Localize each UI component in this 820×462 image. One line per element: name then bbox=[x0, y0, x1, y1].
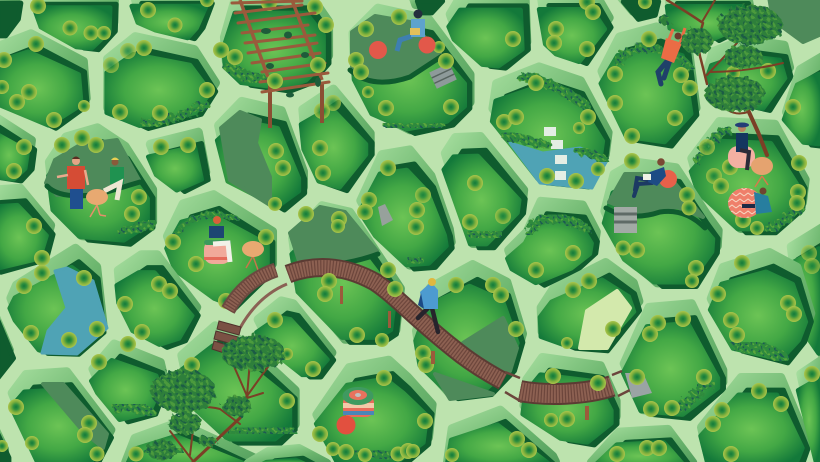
cell 6 bbox=[0, 34, 87, 128]
standing man bbox=[57, 156, 88, 209]
cell 49 bbox=[0, 308, 13, 378]
pergola rungs bbox=[232, 1, 329, 92]
bush: edge bbox=[410, 258, 422, 262]
terrace: under bridge bbox=[290, 207, 377, 264]
bush: hex bbox=[738, 345, 782, 358]
cell 9 bbox=[49, 128, 153, 244]
pergola vines bbox=[261, 28, 321, 98]
tree: top right bbox=[658, 0, 783, 155]
red ball left bbox=[369, 41, 387, 59]
cell 50 bbox=[0, 422, 9, 462]
bush: pond upper bbox=[522, 77, 585, 105]
cell 3 bbox=[132, 0, 212, 39]
terrace: chat cell bbox=[46, 140, 139, 195]
seated person bbox=[209, 216, 224, 238]
cell 14 bbox=[167, 195, 273, 308]
bush: pond right bbox=[578, 150, 605, 160]
cell 35 bbox=[523, 358, 617, 445]
pergola posts bbox=[270, 77, 322, 128]
white trousers bbox=[213, 243, 230, 262]
branches bbox=[170, 361, 270, 462]
cell 27 bbox=[444, 137, 525, 248]
orange ball bbox=[659, 170, 677, 188]
cell 32 bbox=[540, 263, 640, 351]
pale patch bbox=[580, 291, 630, 348]
cell 34 bbox=[623, 304, 723, 418]
bush: centre bbox=[472, 232, 497, 237]
bush: seating lower bbox=[770, 208, 800, 228]
footbridge bbox=[212, 262, 652, 420]
cell 42 bbox=[181, 326, 295, 443]
table bbox=[242, 241, 264, 270]
raised terraces and patches bbox=[42, 16, 705, 448]
thin arc bbox=[240, 284, 287, 328]
shadow bands bbox=[47, 56, 705, 266]
bush: seating bbox=[697, 130, 728, 160]
bridge segment 3 bbox=[520, 386, 612, 394]
bridge rails bbox=[505, 371, 630, 402]
striped stool and red ball bbox=[336, 387, 374, 434]
pergola beams bbox=[240, 0, 322, 80]
round table bbox=[86, 189, 108, 217]
seated man on ball bbox=[614, 158, 677, 233]
terrace: bridge cell lower bbox=[435, 374, 493, 399]
grey stone bbox=[378, 204, 393, 226]
people: stool cell bbox=[204, 216, 264, 270]
stone steps bbox=[614, 207, 637, 233]
side table bbox=[751, 157, 773, 187]
cell 40 bbox=[10, 248, 104, 354]
striped stool bbox=[342, 387, 374, 417]
cell 48 bbox=[247, 449, 328, 462]
cell 23 bbox=[707, 40, 791, 110]
trunk and branches bbox=[667, 0, 783, 155]
bush: chat bbox=[122, 222, 152, 232]
cell 22 bbox=[667, 0, 753, 40]
bush: stool cell bbox=[342, 452, 395, 458]
cell 13 bbox=[0, 188, 53, 272]
red ball bbox=[336, 416, 356, 434]
torso bbox=[661, 38, 682, 63]
hanging man bbox=[658, 28, 685, 84]
head bbox=[674, 32, 682, 40]
cell 36 bbox=[447, 410, 556, 462]
cell 21 bbox=[601, 27, 697, 146]
cell 2 bbox=[34, 0, 116, 50]
cell 43 bbox=[257, 301, 334, 377]
arms bbox=[668, 28, 685, 44]
canopy bbox=[147, 335, 285, 460]
bush: bottom bbox=[150, 449, 178, 452]
cell 31 bbox=[710, 253, 811, 363]
seating group bbox=[728, 122, 773, 218]
cell 10 bbox=[149, 132, 208, 191]
terrace: reader cell bbox=[352, 16, 440, 82]
cell 47 bbox=[126, 423, 259, 462]
pergola bbox=[213, 0, 329, 128]
bridge legs bbox=[340, 286, 589, 420]
cell 28 bbox=[508, 201, 597, 285]
wooden stairs bbox=[212, 321, 241, 354]
pond: lower left bbox=[42, 268, 107, 354]
striped stool bbox=[204, 240, 231, 264]
legs bbox=[634, 178, 652, 196]
woman bbox=[735, 122, 749, 170]
bush: pond left bbox=[505, 135, 548, 146]
legs bbox=[658, 60, 670, 84]
cell 15 bbox=[292, 206, 401, 342]
red ball right bbox=[418, 36, 436, 54]
cell 39 bbox=[798, 359, 820, 462]
pond: stepping stones bbox=[510, 127, 607, 188]
reader figure bbox=[397, 10, 425, 51]
terrace: bridge cell bbox=[463, 318, 517, 371]
sphere over steps bbox=[438, 53, 454, 69]
bush: strip bbox=[145, 105, 205, 123]
patterned rug bbox=[728, 188, 762, 218]
spheres on bridge bbox=[317, 262, 645, 391]
canopy bbox=[658, 5, 782, 112]
seated man bbox=[104, 158, 124, 200]
bush: stepping cell bbox=[530, 217, 585, 232]
cell 24: dark top-right bbox=[768, 0, 820, 42]
cell 5 bbox=[353, 8, 470, 133]
book bbox=[643, 174, 651, 180]
cell 26 bbox=[691, 122, 805, 233]
cell 41 bbox=[117, 255, 198, 347]
cell 46 bbox=[316, 360, 432, 462]
accent balls on pergola bbox=[213, 42, 326, 89]
bush: diagonal bbox=[672, 382, 708, 410]
terrace: man on ball cell bbox=[609, 174, 703, 217]
cell 8 bbox=[0, 116, 35, 181]
cell 25 bbox=[784, 57, 820, 147]
torso bbox=[648, 167, 666, 186]
bush: reader bbox=[386, 124, 440, 127]
walker bbox=[418, 278, 438, 332]
tree: lower left bbox=[147, 335, 285, 462]
bushes bbox=[118, 47, 800, 458]
cell 7 bbox=[107, 37, 216, 128]
cell 1 bbox=[0, 0, 21, 36]
cell 20 bbox=[492, 67, 608, 187]
cell 37 bbox=[591, 429, 693, 462]
cell 12 bbox=[301, 89, 372, 191]
bridge segment 2 bbox=[288, 268, 503, 381]
cell 45 bbox=[11, 372, 111, 462]
bush: arch bbox=[176, 214, 235, 236]
cell 51 bbox=[411, 0, 443, 13]
people: reader bbox=[369, 10, 457, 226]
bush: pergola bbox=[228, 66, 262, 80]
bridge segment 1 bbox=[228, 270, 276, 310]
bush: hanging man bbox=[618, 47, 690, 68]
cell 4 bbox=[224, 0, 329, 91]
cell 30 bbox=[789, 228, 820, 358]
terrace: strip bbox=[43, 384, 107, 448]
cell 19 bbox=[617, 0, 659, 19]
terrace: serpentine cell bbox=[221, 112, 270, 205]
head bbox=[657, 158, 665, 166]
bush: lower left bbox=[118, 406, 150, 414]
cell 11 bbox=[218, 102, 305, 210]
cell 38 bbox=[701, 378, 808, 462]
cell 18 bbox=[539, 0, 611, 63]
man on rug bbox=[742, 188, 772, 214]
cell 44 bbox=[92, 344, 166, 422]
cell 33 bbox=[416, 265, 523, 399]
cell 17 bbox=[449, 0, 528, 68]
cell 16 bbox=[360, 150, 452, 269]
bush: tree cell bbox=[235, 429, 290, 433]
stone steps bbox=[429, 63, 457, 89]
people: chat cell bbox=[57, 156, 124, 217]
cell 29 bbox=[604, 162, 718, 287]
woman's stool bbox=[728, 146, 755, 168]
stone landing bbox=[625, 373, 652, 398]
